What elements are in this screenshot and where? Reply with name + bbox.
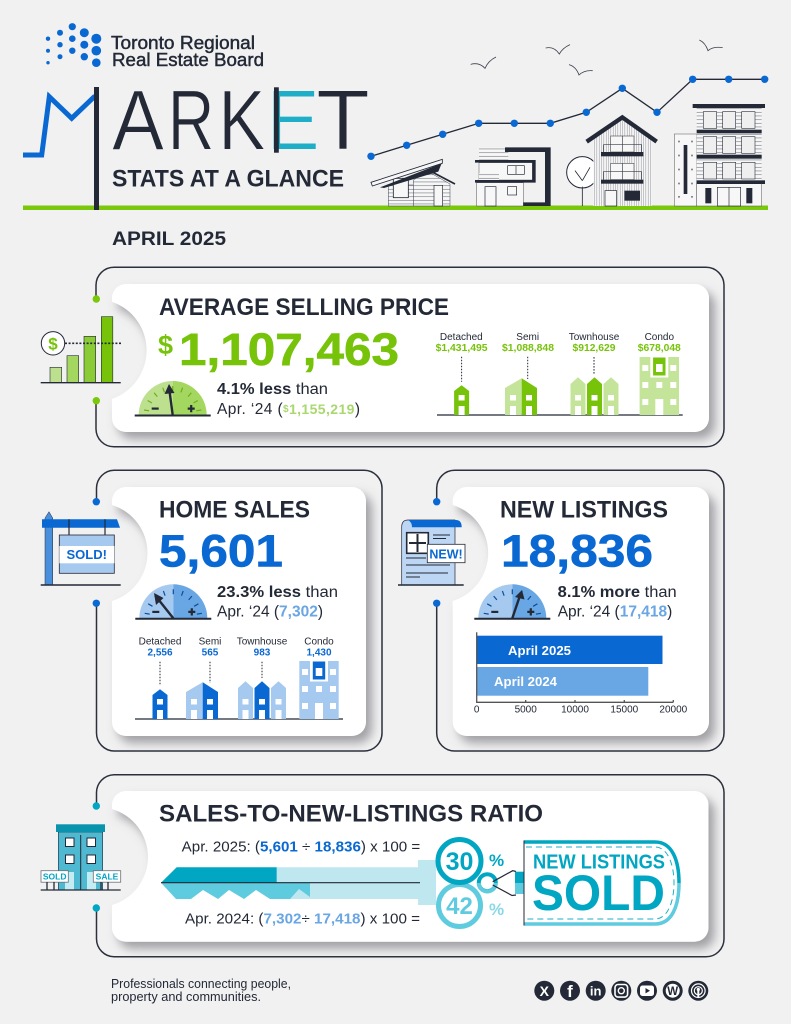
logo: TRREB [46,23,264,70]
social icons: W [667,986,678,998]
big number: 5,601 [159,526,283,577]
logo: TRREB: Real Estate Board [112,50,264,70]
comparison prior year: 1,155,219 [289,401,355,417]
footer tagline: property and communities. [111,990,261,1004]
connector dots [93,295,100,404]
housing type breakdown: Semi [516,332,539,343]
comparison text: 23.3% less than [217,584,338,601]
social icons: in [590,984,602,998]
bar chart: new listings: 0 [474,704,480,715]
big price: $ [158,330,173,360]
panel: average selling price [41,267,724,447]
subtitle: STATS AT A GLANCE [112,166,344,192]
housing type breakdown [135,636,343,719]
footer tagline: Professionals connecting people, [111,977,291,991]
bar chart: new listings: 10000 [561,704,589,715]
housing type breakdown: 983 [254,648,271,659]
connector dots [93,802,100,912]
gauge [135,381,211,416]
panel outline [96,267,724,447]
sold tag: NEW LISTINGS [533,851,665,873]
big number: 18,836 [501,526,653,577]
housing type breakdown: $1,431,495 [436,343,488,354]
big price: 1,107,463 [179,324,399,375]
icon: condo with signs: SOLD [43,872,67,882]
ratio 2024 circle: 42 [446,893,473,920]
white card [112,284,709,432]
bar chart: new listings: April 2024 [494,674,558,689]
ratio 2024 circle [438,884,504,926]
formula 2025: Apr. 2025: (5,601 ÷ 18,836) x 100 = [182,840,420,856]
house 1 [371,159,455,206]
housing type breakdown: 565 [202,648,219,659]
icon: rising price bars: $ [48,334,58,354]
title: MARKET: A [112,74,164,168]
comparison prior year: $ [283,404,289,415]
skyline illustration [371,40,765,206]
panel outline [96,775,724,957]
bar chart: new listings: 15000 [610,704,639,715]
sold tag [493,840,679,926]
bar chart: new listings: April 2025 [508,643,571,658]
sold tag: SOLD [532,865,665,921]
title: MARKET: K [218,74,265,168]
heading: HOME SALES [159,497,310,524]
housing type breakdown [436,332,683,415]
panel outline [437,470,724,751]
formula 2024: Apr. 2024: (7,302÷ 17,418) x 100 = [185,911,420,927]
ratio 2025 circle: % [489,851,504,870]
icon: new listing document: NEW! [429,547,463,561]
icon: sold sign: SOLD! [66,547,107,562]
housing type breakdown: $678,048 [638,343,681,354]
housing type breakdown: Condo [304,636,334,648]
footer tagline [111,977,291,1004]
connector dots [93,498,100,607]
ratio 2024 circle: % [489,900,504,919]
social icons [534,981,708,1001]
house 3 [587,117,657,206]
logo: TRREB: Toronto Regional [111,33,255,53]
comparison prior year: ) [355,401,360,418]
gauge [474,584,550,619]
social icons: f [567,982,573,1001]
housing type breakdown: Townhouse [569,332,620,343]
housing type breakdown: Condo [645,332,674,343]
date: APRIL 2025 [112,229,226,250]
bar chart: new listings: 5000 [515,704,537,715]
key graphic [161,860,496,905]
icon: sold sign [41,512,121,585]
icon: rising price bars [41,317,121,383]
connector dots [433,498,440,607]
green ground line [23,206,768,210]
comparison prior year: Apr. ‘24 (17,418) [558,604,672,621]
white card [453,487,709,736]
icon: new listing document [398,520,465,585]
housing type breakdown: Detached [139,636,181,648]
heading: NEW LISTINGS [500,497,668,524]
bar chart: new listings: 20000 [659,704,688,715]
apartment building [674,104,765,206]
comparison text: 4.1% less than [217,381,328,398]
housing type breakdown: 1,430 [306,648,332,659]
heading: AVERAGE SELLING PRICE [159,294,449,321]
tree [567,157,598,206]
title: MARKET: R [168,74,214,168]
heading: SALES-TO-NEW-LISTINGS RATIO [159,801,543,828]
housing type breakdown: Semi [199,636,221,648]
gauge [135,584,211,619]
housing type breakdown: $1,088,848 [502,343,554,354]
icon: condo with signs [41,824,121,890]
panel: sales-to-new-listings ratio [41,775,724,957]
title: MARKET: E [267,74,320,168]
house 2 [475,147,551,206]
white card [112,791,708,942]
title: MARKET: T [316,74,370,168]
panel: home sales [41,470,382,751]
header [23,23,768,250]
social icons: X [540,983,550,999]
comparison prior year: Apr. ‘24 ( [217,401,283,418]
housing type breakdown: Townhouse [237,636,288,648]
title: MARKET [23,74,370,210]
bar chart: new listings [474,632,688,715]
line chart over skyline [367,76,768,160]
white card [112,487,366,736]
panel outline [96,470,382,751]
ratio 2025 circle [438,840,504,882]
icon: condo with signs: SALE [96,872,119,882]
comparison text: 8.1% more than [558,584,677,601]
comparison prior year: Apr. ‘24 (7,302) [217,604,323,621]
housing type breakdown: Detached [440,332,483,343]
birds [471,40,723,75]
panel: new listings [398,470,724,751]
housing type breakdown: 2,556 [147,648,173,659]
housing type breakdown: $912,629 [572,343,616,354]
ratio 2025 circle: 30 [446,848,473,876]
